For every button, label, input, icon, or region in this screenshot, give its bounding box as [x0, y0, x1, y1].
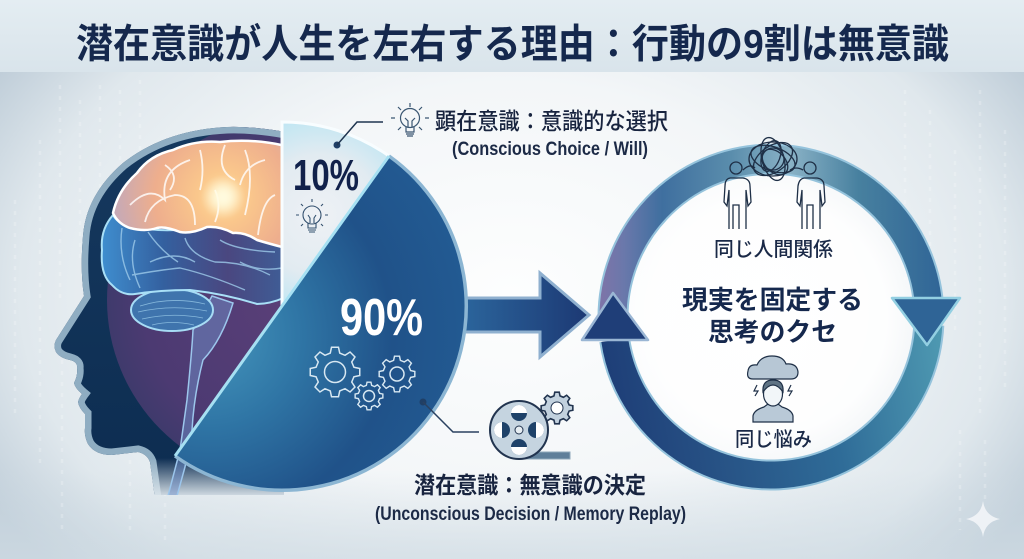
subheading: (Unconscious Decision / Memory Replay): [375, 504, 686, 525]
glow: [210, 184, 236, 210]
icon: gears: [310, 347, 415, 410]
center text: [682, 285, 863, 347]
90% sector: [175, 156, 466, 490]
10% label: 10%: [293, 151, 359, 200]
callout: unconscious: [375, 392, 686, 525]
pie chart: [175, 122, 466, 490]
brainstem: [168, 296, 233, 496]
heading: 潜在意識：無意識の決定: [414, 472, 646, 498]
arrowhead: right: [892, 298, 960, 345]
icon: two people with tangle: [724, 135, 825, 229]
icon: sparkle: [966, 501, 1000, 537]
person right: [797, 162, 825, 229]
arrowhead: left: [582, 293, 648, 340]
90% label: 90%: [340, 289, 423, 347]
lower ring arrow: [615, 325, 929, 475]
subheading: (Conscious Choice / Will): [452, 139, 648, 160]
icon: worried person under cloud: [748, 356, 798, 422]
icon: light bulb: [391, 103, 429, 136]
label: same worries: 同じ悩み: [735, 428, 812, 451]
icon: small light bulb: [296, 199, 328, 232]
leader line: [420, 398, 479, 432]
tangle: [743, 135, 803, 183]
loop diagram: [582, 135, 960, 475]
icon: film reel: [490, 392, 573, 459]
inner purple area of head: [107, 126, 280, 446]
center text: 現実を固定する: [682, 285, 863, 315]
ring interior: [625, 171, 917, 463]
arrow: pie to loop: [440, 273, 589, 357]
title band: [0, 0, 1024, 72]
label: same relationships: 同じ人間関係: [714, 238, 833, 261]
cerebellum: [131, 289, 213, 331]
callout: conscious: [334, 103, 668, 160]
leader line: [334, 122, 383, 148]
upper brain: [113, 141, 290, 249]
person left: [724, 162, 751, 229]
10% wedge: [282, 122, 389, 306]
title: 潜在意識が人生を左右する理由：行動の9割は無意識: [76, 22, 949, 66]
center text: 思考のクセ: [708, 317, 837, 347]
brain: [102, 141, 290, 496]
lower brain: [102, 215, 290, 304]
head silhouette with brain: [54, 126, 284, 495]
heading: 顕在意識：意識的な選択: [435, 108, 668, 134]
upper ring arrow: [613, 159, 929, 320]
